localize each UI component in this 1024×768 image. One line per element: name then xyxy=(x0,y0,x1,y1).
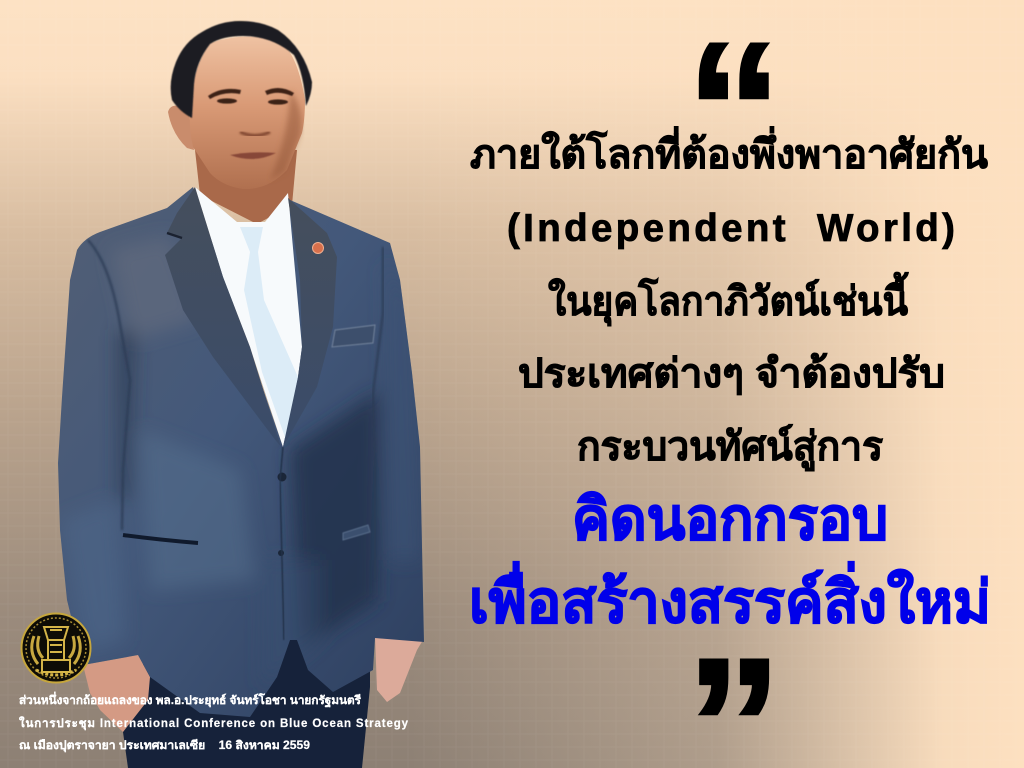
left hand xyxy=(83,655,150,732)
highlight line 1: คิดนอกกรอบ xyxy=(572,487,888,552)
right eye xyxy=(268,99,288,105)
seal emblem xyxy=(42,627,70,672)
shirt xyxy=(195,187,302,447)
lapel notch xyxy=(167,233,182,238)
government seal xyxy=(22,614,90,682)
neck xyxy=(195,150,297,224)
nose xyxy=(240,132,270,136)
right hand xyxy=(375,636,423,702)
jacket xyxy=(50,180,430,725)
quote line 2: (Independent World) xyxy=(507,207,955,250)
head xyxy=(190,37,305,189)
quote body xyxy=(470,126,988,471)
caption: source of the quote xyxy=(19,691,409,753)
caption line 1: ส่วนหนึ่งจากถ้อยแถลงของ พล.อ.ประยุทธ์ จันทร์โอชา นายกรัฐมนตรี xyxy=(19,691,362,708)
right hip pocket xyxy=(343,525,370,540)
quote line 5: กระบวนทัศน์สู่การ xyxy=(577,424,884,471)
right lapel xyxy=(283,198,337,447)
left lapel xyxy=(165,187,281,447)
lapel pin xyxy=(312,242,324,254)
seal supporters xyxy=(32,636,80,664)
trousers xyxy=(123,630,370,768)
quote line 3: ในยุคโลกาภิวัตน์เช่นนี้ xyxy=(548,272,909,327)
caption line 3: ณ เมืองปุตราจายา ประเทศมาเลเซีย 16 สิงหาคม 2559 xyxy=(19,739,310,753)
lower jacket button xyxy=(278,550,284,556)
jacket button xyxy=(278,472,286,482)
necktie xyxy=(240,227,298,440)
right brow xyxy=(265,88,294,96)
ear xyxy=(168,106,194,150)
jacket closure xyxy=(280,447,284,640)
breast pocket xyxy=(332,325,375,347)
left eye xyxy=(217,98,237,104)
mouth xyxy=(230,152,276,159)
highlight line 2: เพื่อสร้างสรรค์สิ่งใหม่ xyxy=(469,561,991,635)
arm seams xyxy=(88,240,130,530)
hip pocket xyxy=(123,535,198,543)
left brow xyxy=(208,89,241,99)
caption line 2: ในการประชุม International Conference on Blue Ocean Strategy xyxy=(19,716,409,731)
hair xyxy=(171,21,312,118)
suit shading xyxy=(75,240,416,638)
face shadow xyxy=(270,90,301,180)
quote line 4: ประเทศต่างๆ จำต้องปรับ xyxy=(518,352,945,396)
seal ribbon xyxy=(36,670,76,675)
quote line 1: ภายใต้โลกที่ต้องพึ่งพาอาศัยกัน xyxy=(470,126,988,177)
highlighted conclusion xyxy=(469,487,991,635)
portrait: man in a blue-grey suit xyxy=(50,21,430,768)
